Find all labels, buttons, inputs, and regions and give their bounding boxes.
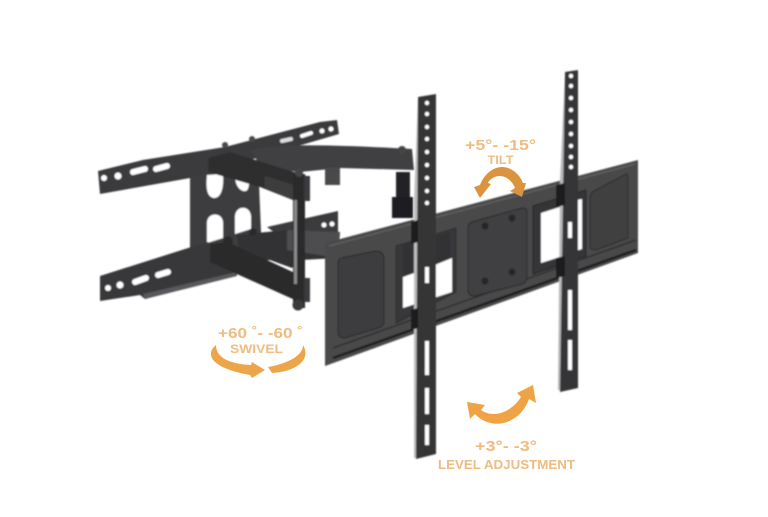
swing arm: lower (210, 228, 340, 301)
right vertical rail (556, 70, 578, 392)
icon: tilt double arrow (474, 167, 526, 198)
icon: level adjustment arrow (467, 385, 536, 424)
swing arm: upper (208, 145, 414, 218)
wall plate: vertical frame (190, 160, 262, 262)
window: left (396, 228, 456, 323)
swivel value: +60 ˚- -60 ˚ (218, 325, 303, 342)
swivel label: SWIVEL (230, 342, 283, 356)
swing arm: elbow pivot (292, 169, 310, 310)
icon: swivel arrow left (211, 345, 265, 378)
wall plate: upper rail (98, 120, 339, 194)
tilt label: TILT (488, 153, 514, 167)
center VESA pad (468, 208, 527, 296)
callout: tilt (465, 137, 536, 198)
icon: swivel arrow right (268, 345, 305, 373)
window: right (533, 190, 586, 274)
pad: right (590, 174, 628, 250)
tilt value: +5°- -15° (465, 137, 536, 154)
callout: level adjustment (438, 385, 575, 472)
left vertical rail (411, 94, 436, 459)
level label: LEVEL ADJUSTMENT (438, 458, 575, 472)
level value: +3°- -3° (475, 438, 537, 455)
main horizontal TV plate (325, 160, 638, 366)
TV wall mount product illustration (98, 70, 638, 459)
pad: left (338, 251, 384, 338)
callout: swivel (211, 325, 305, 378)
wall plate: lower rail (100, 211, 338, 301)
